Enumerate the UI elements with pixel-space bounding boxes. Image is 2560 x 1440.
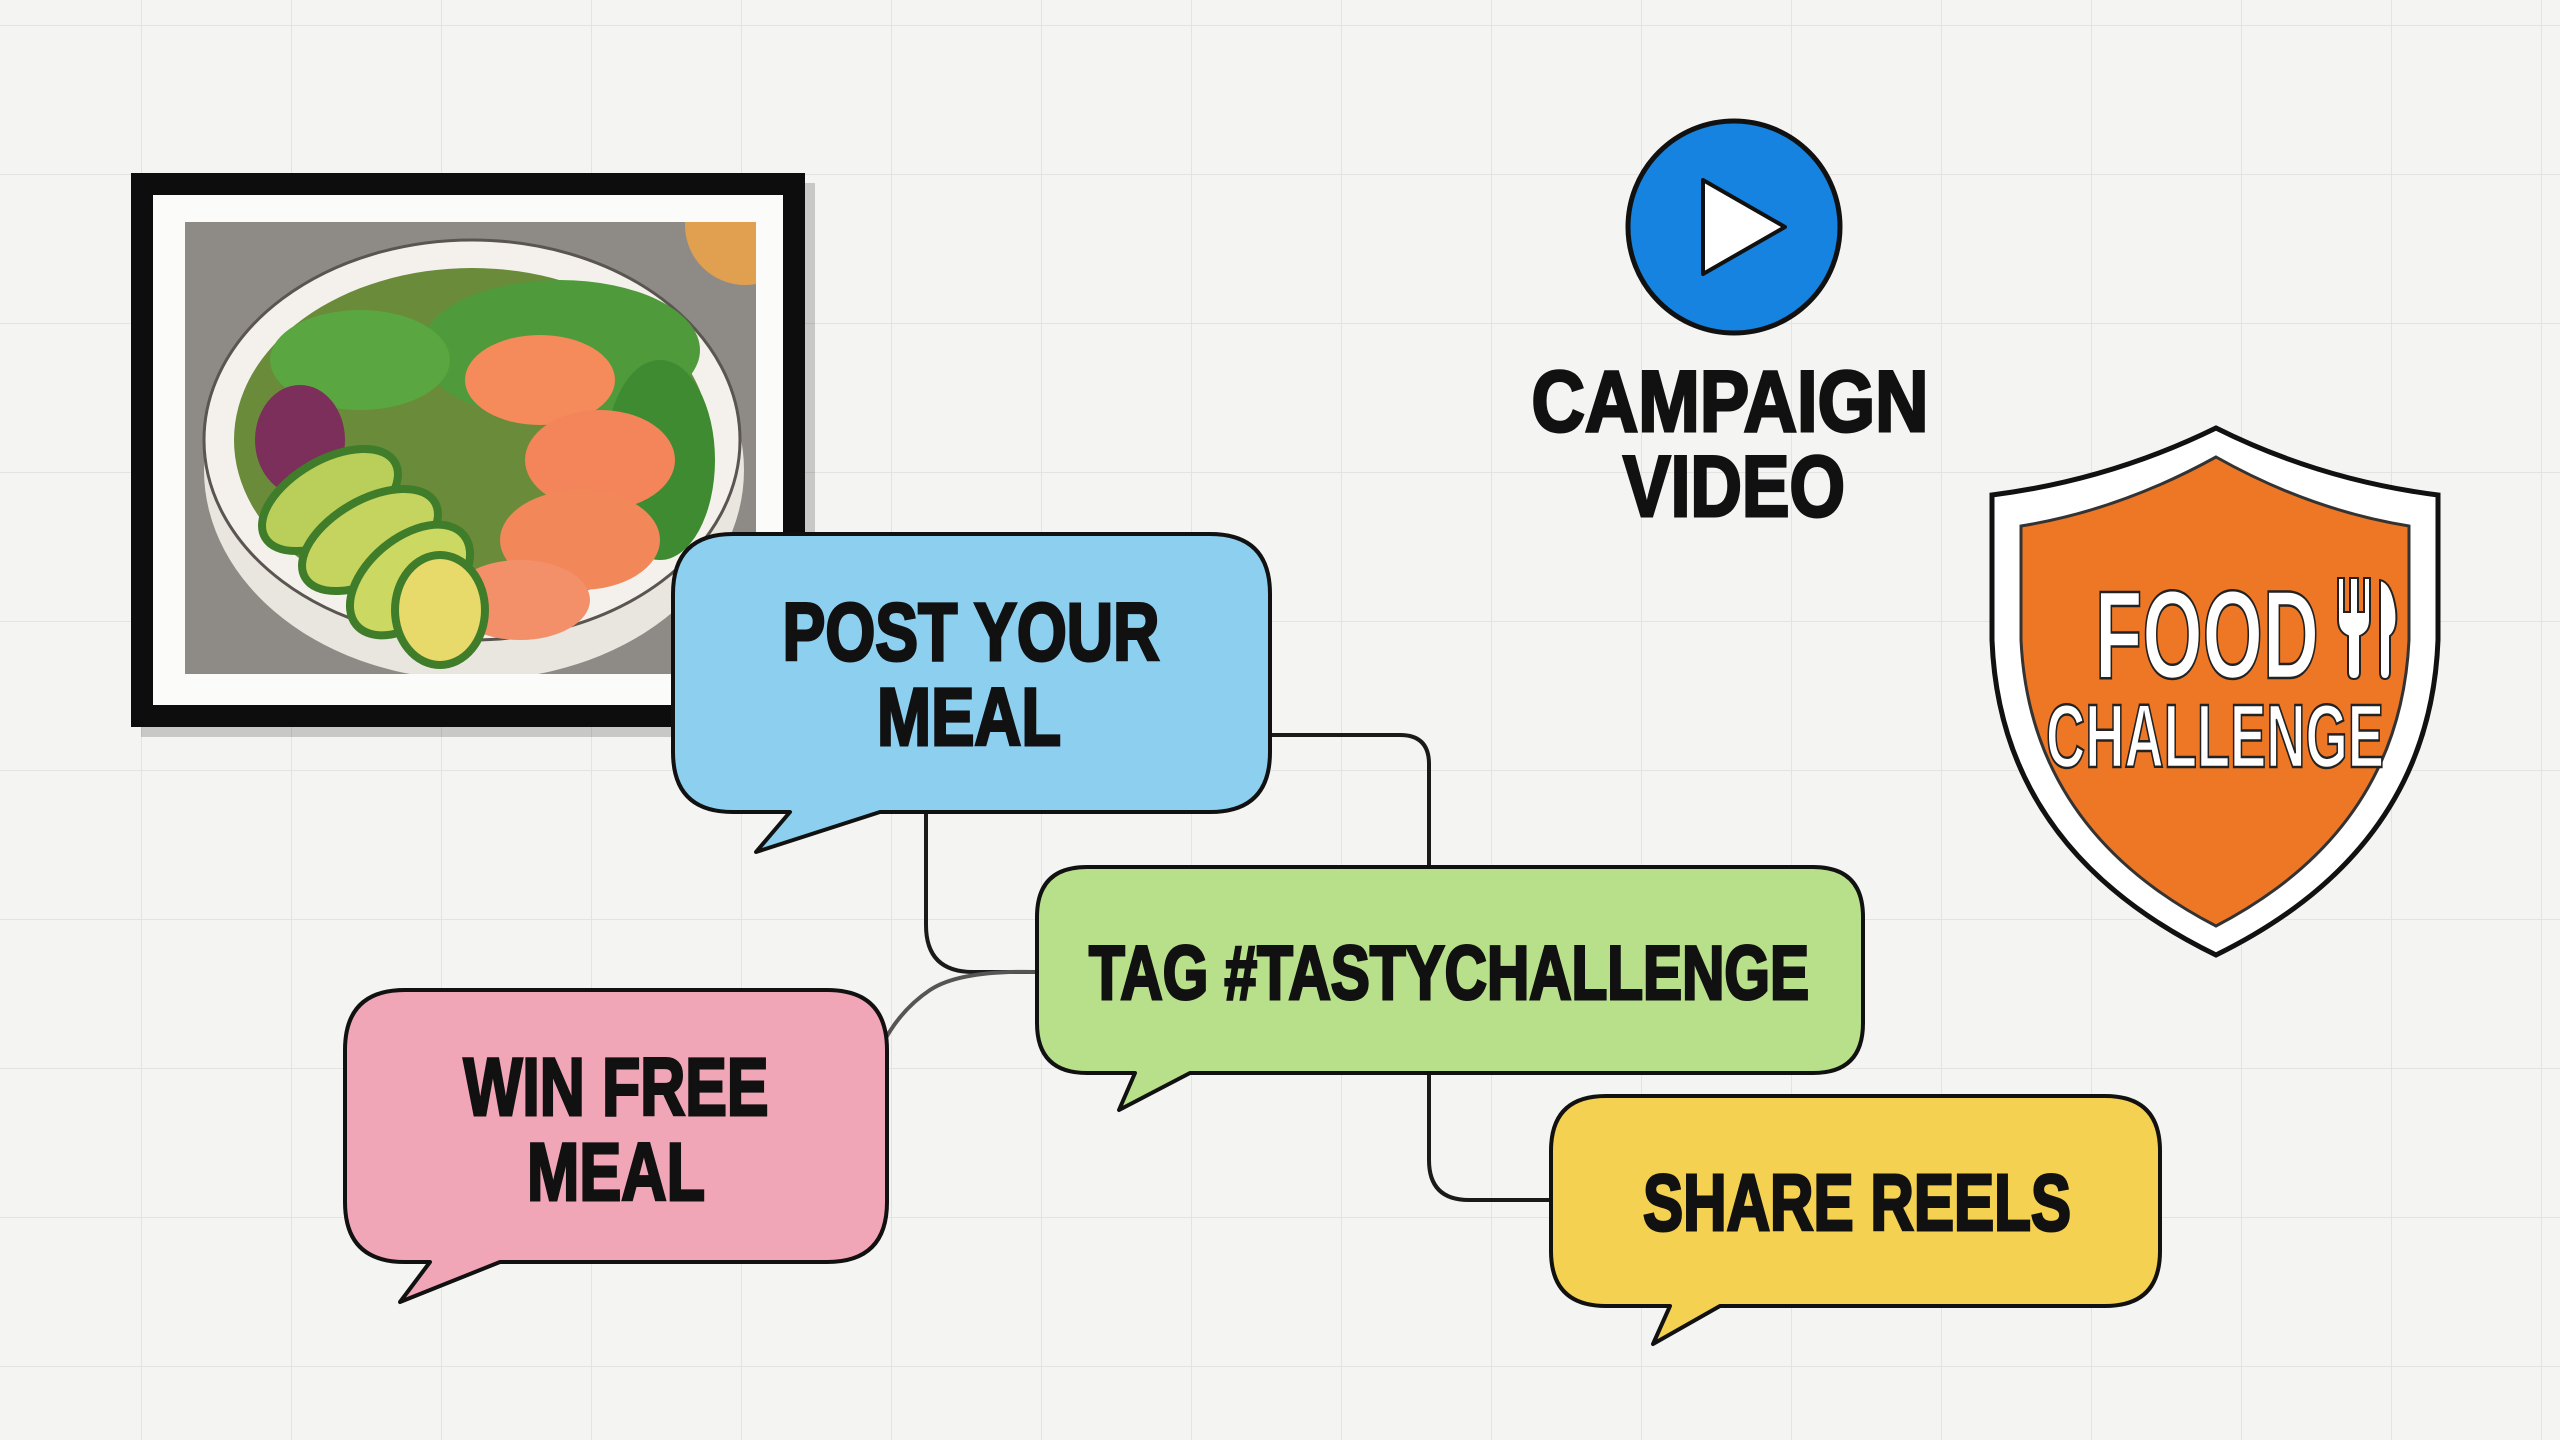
heading: campaign video bbox=[1532, 354, 1928, 535]
heading: campaign video: VIDEO bbox=[1623, 439, 1845, 535]
bowl bbox=[204, 442, 744, 674]
salmon bbox=[465, 335, 615, 425]
bubble: win free meal bbox=[345, 990, 887, 1302]
badge: food challenge shield bbox=[1992, 428, 2438, 955]
framed food photo bbox=[131, 165, 815, 737]
bubble: tag #tastychallenge: TAG #TASTYCHALLENGE bbox=[1089, 931, 1809, 1016]
bubble: share reels: SHARE REELS bbox=[1643, 1158, 2071, 1247]
badge: food challenge shield: FOOD bbox=[2095, 566, 2319, 705]
bubble: win free meal: MEAL bbox=[527, 1127, 705, 1218]
connector lines bbox=[882, 735, 1551, 1200]
bubble: win free meal: WIN FREE bbox=[464, 1042, 768, 1133]
heading: campaign video: CAMPAIGN bbox=[1532, 354, 1928, 450]
greens bbox=[420, 280, 700, 420]
bubble: tag #tastychallenge bbox=[1037, 867, 1863, 1110]
bubble: post your meal: POST YOUR bbox=[782, 587, 1160, 678]
bubble: post your meal: MEAL bbox=[877, 672, 1061, 763]
icon: play button bbox=[1628, 121, 1840, 333]
bubble: post your meal bbox=[673, 534, 1270, 852]
avocado bbox=[258, 445, 402, 555]
icon: fork and knife bbox=[2338, 578, 2396, 679]
bubble: share reels bbox=[1551, 1096, 2160, 1344]
